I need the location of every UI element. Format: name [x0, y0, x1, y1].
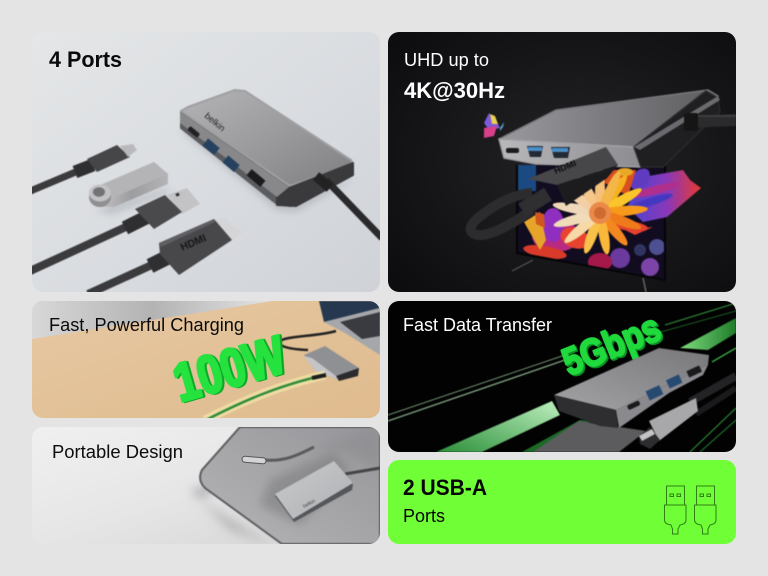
icon: HDMI connector and looped cable: HDMI [552, 158, 578, 176]
panel: 2 USB-A ports [388, 460, 736, 544]
subheading: Ports: Ports [403, 506, 445, 526]
icon: hub device [499, 90, 736, 167]
icon: hub device: belkin [302, 498, 317, 510]
heading: Fast Data Transfer: Fast Data Transfer [403, 315, 552, 335]
icon: HDMI connector and looped cable [471, 147, 618, 235]
panel: 4 ports [32, 32, 380, 292]
panel: UHD up to 4K@30Hz [388, 32, 736, 292]
icon: hub device: belkin [203, 111, 227, 133]
shadows [95, 125, 355, 214]
icon: hub device [180, 90, 382, 238]
icon: HDMI cable: HDMI [179, 232, 208, 254]
wall background [32, 301, 272, 339]
icon: laptop sleeve [190, 427, 380, 544]
icon: USB-C cable [28, 144, 137, 192]
heading: 2 USB-A: 2 USB-A [403, 475, 487, 500]
label: 5Gbps: 5Gbps [556, 306, 667, 384]
heading: UHD up to: UHD up to [404, 50, 489, 70]
icon: television with flower [512, 165, 701, 292]
heading: Fast, Powerful Charging: Fast, Powerful Charging [49, 315, 244, 335]
icon: USB flash drive [89, 162, 168, 207]
icon: USB plug 2 [694, 486, 716, 534]
icon: HDMI cable [88, 218, 243, 294]
panel: portable design [32, 427, 380, 544]
speed light streaks [388, 303, 736, 452]
icon: USB plug 1 [664, 486, 686, 534]
panel: fast charging [32, 301, 380, 418]
label: 100W: 100W [167, 325, 292, 414]
heading: 4 Ports: 4 Ports [49, 47, 122, 72]
heading: Portable Design: Portable Design [52, 442, 183, 462]
heading: 4K@30Hz: 4K@30Hz [404, 78, 505, 103]
icon: laptop [319, 301, 380, 355]
panel: fast data transfer [388, 301, 736, 452]
icon: hub device [554, 348, 709, 428]
icon: hub with cable [280, 331, 359, 381]
icon: glowing charging cable [205, 375, 326, 420]
icon: USB-C plug and cables [533, 376, 736, 452]
icon: butterfly [484, 113, 504, 138]
icon: hub device [275, 461, 353, 522]
icon: USB-A cable [28, 188, 200, 272]
icon: cable connector [242, 456, 266, 464]
